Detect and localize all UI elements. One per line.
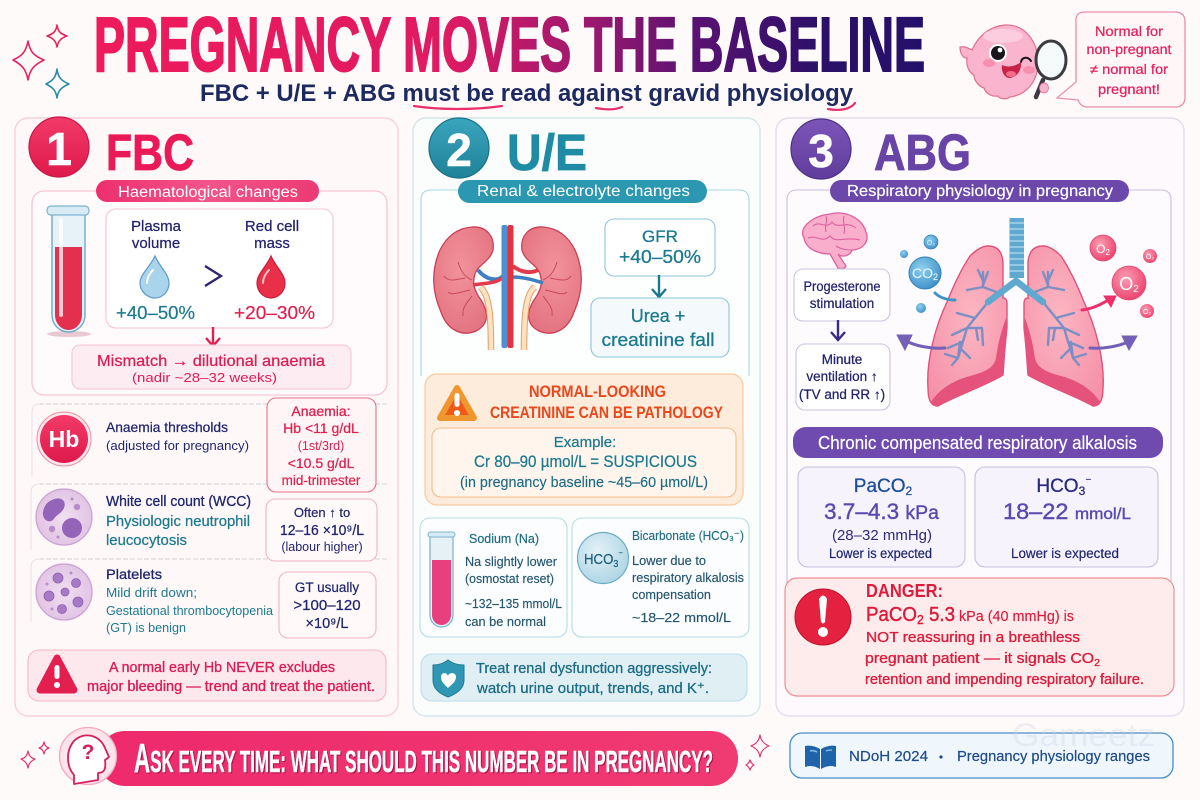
gas arrows xyxy=(897,293,1137,350)
pill heading xyxy=(458,180,707,203)
card: HCO3: 18–22 mmol/L xyxy=(1003,499,1131,524)
value box: <10.5 g/dL xyxy=(288,455,354,471)
pill heading: Renal & electrolyte changes xyxy=(477,183,690,200)
card: HCO3: 3 xyxy=(1079,484,1086,498)
red cell column: +20–30% xyxy=(234,303,315,323)
callout: danger: PaCO xyxy=(866,604,920,626)
callout: treat renal dysfunction: Treat renal dysfunction aggressively: xyxy=(476,660,712,677)
callout: bleeding warning: A normal early Hb NEVER excludes xyxy=(109,659,335,676)
callout: danger: kPa (40 mmHg) is xyxy=(959,609,1074,625)
callout: danger: 5.3 xyxy=(924,604,955,626)
O2 bubbles: O xyxy=(1119,274,1133,294)
icon: Hb: Hb xyxy=(49,426,79,452)
panel: haematological changes xyxy=(32,180,387,395)
arrow down xyxy=(831,320,845,340)
value box xyxy=(267,398,376,492)
pill heading: Respiratory physiology in pregnancy xyxy=(847,183,1113,200)
urea box: creatinine fall xyxy=(602,330,714,350)
callout: normal-looking creatinine: CREATININE CAN BE PATHOLOGY xyxy=(490,403,724,422)
card: bicarbonate: compensation xyxy=(632,587,711,602)
GFR box: GFR xyxy=(642,227,678,246)
pill heading: Haematological changes xyxy=(118,184,298,201)
card: sodium: ~132–135 mmol/L xyxy=(465,596,562,611)
arrow down xyxy=(652,275,666,297)
icon: kidneys xyxy=(434,225,581,350)
callout: dilutional anaemia xyxy=(72,345,351,389)
heading: U/E: U/E xyxy=(507,124,587,181)
card: PaCO2: Lower is expected xyxy=(829,546,932,561)
card: sodium: Na slightly lower xyxy=(465,554,558,569)
value box: (1st/3rd) xyxy=(298,439,344,453)
source box: NDoH 2024 xyxy=(849,748,928,765)
red cell column xyxy=(234,218,315,323)
panel: plasma vs red cell xyxy=(106,209,333,328)
O2 bubbles: 2 xyxy=(1105,248,1110,257)
value box: 12–16 ×10⁹/L xyxy=(280,523,364,539)
illustration: lungs and gas exchange xyxy=(897,218,1157,406)
icon: open book xyxy=(805,746,836,769)
section badge 1 xyxy=(29,117,89,177)
panel: FBC xyxy=(15,117,398,716)
label: Anaemia thresholds xyxy=(106,419,228,435)
card: sodium xyxy=(420,518,567,637)
urea box: Urea + xyxy=(631,306,685,326)
callout: speech bubble: non-pregnant xyxy=(1086,42,1172,57)
banner: ask every time xyxy=(60,728,738,786)
card: bicarbonate: ~18–22 mmol/L xyxy=(632,610,731,625)
pill heading xyxy=(96,180,319,202)
panel: respiratory physiology xyxy=(787,180,1171,585)
label: Physiologic neutrophil xyxy=(106,514,250,530)
CO2 bubbles: 2 xyxy=(933,272,938,282)
card: PaCO2: (28–32 mmHg) xyxy=(832,527,932,544)
value box xyxy=(266,499,377,561)
value box: Anaemia: xyxy=(291,403,351,419)
pill heading xyxy=(830,180,1129,202)
card: PaCO2: 2 xyxy=(906,484,913,498)
card: HCO3 xyxy=(975,467,1158,567)
watermark: Gameetz xyxy=(1012,717,1155,753)
mascot with magnifier xyxy=(960,25,1066,99)
label: Platelets xyxy=(106,566,162,582)
value box: GT usually xyxy=(295,580,359,595)
value box: >100–120 xyxy=(293,597,361,614)
label xyxy=(106,419,249,453)
GFR box xyxy=(605,219,715,276)
callout: bleeding warning: major bleeding — trend and treat the patient. xyxy=(87,678,375,695)
value box: (labour higher) xyxy=(281,540,363,554)
label xyxy=(106,566,274,635)
GFR box: +40–50% xyxy=(619,247,701,267)
icon: neutrophil xyxy=(36,489,92,545)
O2 bubbles: O₂ xyxy=(1143,309,1151,316)
card: PaCO2 xyxy=(798,467,965,567)
callout: speech bubble xyxy=(1057,12,1185,107)
icon: test tube xyxy=(428,532,455,627)
example box xyxy=(432,428,736,497)
callout: speech bubble: ≠ normal for xyxy=(1090,62,1169,77)
O2 bubbles: O xyxy=(1096,242,1105,256)
label: White cell count (WCC) xyxy=(106,494,251,510)
callout: danger: pregnant patient — it signals CO xyxy=(865,650,1082,667)
section badge 2 xyxy=(429,118,489,178)
example box: Cr 80–90 µmol/L = SUSPICIOUS xyxy=(474,452,697,471)
CO2 bubbles xyxy=(900,235,941,313)
plasma column: Plasma xyxy=(131,218,182,235)
progesterone box: stimulation xyxy=(810,296,874,311)
icon: HCO3 bubble: HCO xyxy=(584,551,617,568)
icon: HCO3 bubble: 3 xyxy=(613,559,619,570)
source box: Pregnancy physiology ranges xyxy=(957,748,1150,765)
greater-than symbol xyxy=(205,266,221,286)
CO2 bubbles: CO xyxy=(912,265,933,281)
panel: renal changes xyxy=(421,180,749,376)
icon: footer sparkles xyxy=(21,735,769,770)
section badge 3: 3 xyxy=(808,125,834,177)
value box: Often ↑ to xyxy=(294,505,350,520)
card: sodium: (osmostat reset) xyxy=(465,571,554,586)
callout: bleeding warning xyxy=(28,650,386,701)
minute ventilation box xyxy=(796,344,890,410)
red cell column: mass xyxy=(254,235,290,252)
value box: Hb <11 g/dL xyxy=(283,420,359,436)
callout: normal-looking creatinine: NORMAL-LOOKING xyxy=(529,382,666,401)
callout: danger: 2 xyxy=(917,612,924,627)
urea box xyxy=(591,298,729,357)
panel: U/E xyxy=(413,118,760,716)
icon: head with question mark: ? xyxy=(82,741,94,764)
source box xyxy=(790,717,1173,778)
value box: ×10⁹/L xyxy=(306,616,348,632)
value box: mid-trimester xyxy=(282,473,361,488)
callout: dilutional anaemia: Mismatch → dilutional anaemia xyxy=(97,353,325,370)
callout: normal-looking creatinine xyxy=(425,374,743,505)
card: PaCO2: 3.7–4.3 kPa xyxy=(824,499,939,524)
panel: ABG xyxy=(776,118,1184,716)
icon: danger exclamation xyxy=(795,589,851,645)
card: HCO3: HCO xyxy=(1036,476,1079,497)
card: PaCO2: PaCO xyxy=(854,476,906,497)
bar: chronic compensated respiratory alkalosis: Chronic compensated respiratory alkalosis xyxy=(818,433,1137,453)
callout: danger xyxy=(785,578,1174,696)
arrow down xyxy=(206,327,220,346)
icon: test tube of blood xyxy=(47,206,91,337)
subtitle: FBC + U/E + ABG must be read against gravid physiology xyxy=(200,80,853,107)
value box xyxy=(279,572,376,638)
red cell column: Red cell xyxy=(245,218,299,235)
icon: shield xyxy=(433,660,464,697)
icon: Hb xyxy=(37,412,91,466)
heading: FBC: FBC xyxy=(106,124,194,181)
plasma column: volume xyxy=(132,235,180,252)
callout: danger: 2 xyxy=(1094,658,1100,669)
card: bicarbonate: respiratory alkalosis xyxy=(632,570,744,585)
plasma column: +40–50% xyxy=(116,303,195,323)
label: (adjusted for pregnancy) xyxy=(106,438,249,453)
O2 bubbles: 2 xyxy=(1133,284,1139,295)
O2 bubbles xyxy=(1090,235,1157,318)
minute ventilation box: Minute xyxy=(822,352,862,367)
O2 bubbles: O₂ xyxy=(1146,254,1154,261)
callout: danger: retention and impending respiratory failure. xyxy=(865,671,1144,688)
card: bicarbonate: Bicarbonate (HCO₃⁻) xyxy=(632,528,744,543)
card: sodium: Sodium (Na) xyxy=(469,531,539,546)
progesterone box: Progesterone xyxy=(804,279,880,294)
card: HCO3: Lower is expected xyxy=(1011,546,1119,561)
label: (GT) is benign xyxy=(106,620,186,635)
bar: chronic compensated respiratory alkalosis xyxy=(793,427,1163,458)
row: anaemia thresholds xyxy=(37,398,376,492)
callout: treat renal dysfunction: watch urine output, trends, and K⁺. xyxy=(476,680,709,697)
heading: ABG: ABG xyxy=(874,124,971,181)
icon: HCO3 bubble: ⁻ xyxy=(618,550,623,561)
section badge 2: 2 xyxy=(446,124,472,176)
card: HCO3: ⁻ xyxy=(1085,474,1092,488)
callout: danger: NOT reassuring in a breathless xyxy=(866,629,1080,646)
banner text: ASK EVERY TIME: WHAT SHOULD THIS NUMBER BE IN PREGNANCY? xyxy=(134,735,713,781)
icon: brain xyxy=(803,213,867,269)
example box: Example: xyxy=(554,434,616,451)
progesterone box xyxy=(794,269,890,321)
card: bicarbonate: Lower due to xyxy=(632,553,706,568)
label xyxy=(106,494,251,549)
card: bicarbonate xyxy=(572,518,749,637)
icon: warning triangle xyxy=(40,658,74,690)
icon: warning triangle xyxy=(440,388,474,418)
row: white cell count xyxy=(36,489,377,561)
label: leucocytosis xyxy=(106,533,187,549)
callout: speech bubble: pregnant! xyxy=(1098,82,1160,97)
icon: head with question mark xyxy=(60,728,116,784)
section badge 3 xyxy=(791,119,851,179)
label: Gestational thrombocytopenia xyxy=(106,603,274,618)
example box: (in pregnancy baseline ~45–60 µmol/L) xyxy=(460,475,708,491)
callout: speech bubble: Normal for xyxy=(1095,24,1164,39)
icon: platelets xyxy=(36,564,92,620)
minute ventilation box: ventilation ↑ xyxy=(806,369,878,384)
section badge 1: 1 xyxy=(46,123,72,175)
icon: header sparkles xyxy=(13,25,69,98)
minute ventilation box: (TV and RR ↑) xyxy=(799,387,885,402)
icon: HCO3 bubble xyxy=(578,532,628,584)
callout: treat renal dysfunction xyxy=(421,654,747,701)
plasma column xyxy=(116,218,195,323)
callout: danger: DANGER: xyxy=(866,581,943,601)
row: platelets xyxy=(36,564,376,638)
callout: dilutional anaemia: (nadir ~28–32 weeks) xyxy=(132,370,277,385)
card: sodium: can be normal xyxy=(465,614,546,629)
label: Mild drift down; xyxy=(106,585,197,600)
CO2 bubbles: O₂ xyxy=(927,240,935,247)
